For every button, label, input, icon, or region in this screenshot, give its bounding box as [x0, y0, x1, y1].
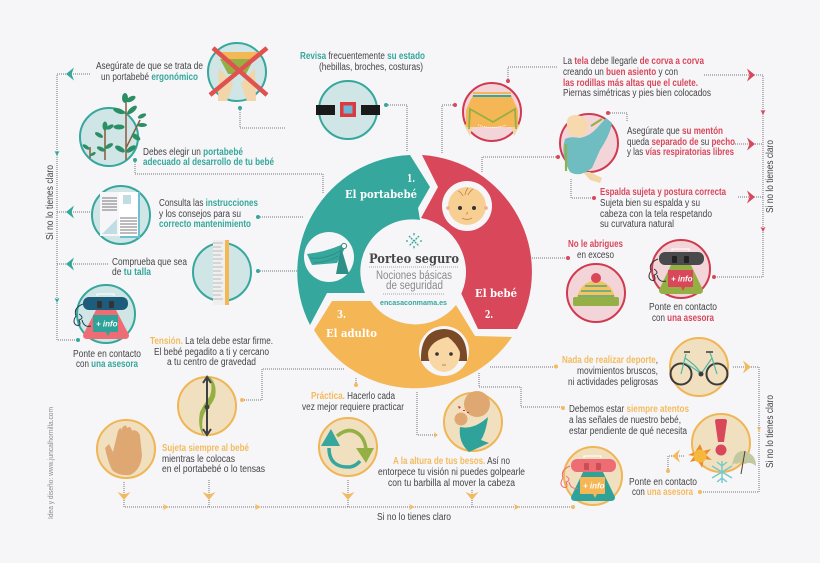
text: attentive: a las señales de nuestro bebé,: [569, 415, 681, 426]
text: chin: [627, 126, 735, 158]
text: hold baby: Sujeta siempre al bebé: [162, 443, 249, 454]
icon: instructions booklet: [92, 186, 150, 244]
text: corva a corva: las rodillas más altas que el culete.: [563, 78, 698, 89]
icon: carrier seat red: [463, 83, 521, 141]
text: contact adviser teal: con una asesora: [76, 359, 138, 370]
icon: telephone teal: [74, 285, 135, 343]
text: right carrier for development: [143, 147, 274, 168]
connectors: yellow bottom and right: [118, 360, 761, 510]
text: no sport: ni actividades peligrosas: [568, 377, 658, 388]
text: ergonomic carrier: [96, 61, 203, 83]
icon: buckle: [316, 81, 380, 139]
text: attentive: Debemos estar siempre atentos: [569, 404, 689, 415]
text: kisses: [378, 456, 525, 489]
segment labels: [326, 172, 517, 340]
text: tension: a tu centro de gravedad: [167, 357, 256, 368]
subtitle: de seguridad: [386, 280, 443, 292]
center logo: [406, 233, 422, 249]
text: contact adviser yellow: con una asesora: [632, 487, 693, 498]
text: hold baby: en el portabebé o lo tensas: [162, 464, 265, 475]
icon: adult face: [419, 326, 469, 376]
text: no sport: [562, 355, 658, 388]
text: credit: Idea y diseño: www.juncalhornilla.com: [48, 407, 55, 519]
icon: telephone teal: + info: [96, 320, 118, 328]
text: contact adviser teal: Ponte en contacto: [73, 349, 141, 360]
text: chin: queda separado de su pecho: [627, 137, 735, 148]
text: contact adviser yellow: Ponte en contacto: [629, 477, 697, 488]
segment labels: 1.: [407, 172, 415, 185]
text: instructions: [159, 198, 258, 230]
text: practice: [302, 391, 405, 413]
text: corva a corva: Piernas simétricas y pies bien colocados: [563, 88, 711, 99]
subtitle: Nociones básicas: [376, 270, 452, 282]
central donut chart: [297, 155, 532, 388]
icon: baby face: [442, 181, 492, 231]
text: instructions: Consulta las instrucciones: [159, 198, 258, 209]
connectors: red right column: [442, 67, 766, 279]
text: size: [112, 257, 187, 278]
icon: cycle arrows: [319, 418, 377, 476]
segment labels: 2.: [485, 308, 493, 321]
icon: warning with weather: [688, 414, 756, 483]
text: revisa: Revisa frecuentemente su estado: [300, 51, 425, 62]
icon: non-ergonomic carrier crossed out: [208, 43, 267, 101]
text: attentive: [569, 404, 689, 437]
text: no sport: movimientos bruscos,: [577, 366, 658, 377]
text: right carrier for development: adecuado al desarrollo de tu bebé: [143, 157, 274, 168]
text: no overdress: No le abrigues: [568, 239, 623, 250]
text: practice: vez mejor requiere practicar: [302, 402, 405, 413]
segment labels: El bebé: [475, 287, 517, 300]
heading: Porteo seguro: [369, 252, 459, 267]
text: instructions: y los consejos para su: [159, 209, 241, 220]
text: chin: Asegúrate que su mentón: [627, 126, 723, 137]
text: kisses: entorpece tu visión ni puedes golpearle: [378, 467, 525, 478]
text: hold baby: mientras le colocas: [162, 454, 235, 465]
icon: measuring tape: [193, 240, 251, 305]
text: right side vertical lower: Si no lo tienes claro: [765, 395, 776, 468]
segment labels: 3.: [337, 308, 346, 321]
text: back: su curvatura natural: [600, 219, 674, 230]
text: corva a corva: [563, 56, 711, 99]
text: tension: El bebé pegadito a ti y cercano: [154, 347, 269, 358]
text: chin: y las vías respiratorias libres: [627, 147, 734, 158]
segment labels: El portabebé: [345, 188, 417, 201]
text: ergonomic carrier: Asegúrate de que se trata de: [96, 61, 203, 72]
text: instructions: correcto mantenimiento: [159, 219, 251, 230]
subtitle: [376, 270, 452, 292]
connectors: teal left column: [54, 68, 407, 342]
segment: el portabebé: [297, 155, 430, 325]
text: left vertical: Si no lo tienes claro: [45, 165, 56, 240]
text: contact adviser red: Ponte en contacto: [649, 302, 717, 313]
text: contact adviser yellow: [629, 477, 697, 498]
icon: telephone red: [649, 240, 710, 298]
text: no overdress: [568, 239, 623, 261]
text: kisses: A la altura de tus besos. Así no: [393, 456, 510, 467]
icon: kissing height: [444, 391, 502, 452]
text: bottom label: Si no lo tienes claro: [377, 512, 451, 523]
text: contact adviser red: con una asesora: [652, 313, 714, 324]
text: contact adviser teal: [73, 349, 141, 370]
text: back: Espalda sujeta y postura correcta: [600, 187, 726, 198]
text: corva a corva: La tela debe llegarle de corva a corva: [563, 56, 704, 67]
text: kisses: con tu barbilla al mover la cabeza: [388, 478, 515, 489]
text: size: de tu talla: [112, 267, 151, 278]
text: right carrier for development: Debes elegir un portabebé: [143, 147, 243, 158]
icon: telephone yellow: [561, 447, 622, 505]
text: back: Sujeta bien su espalda y su: [600, 198, 700, 209]
text: right side vertical upper: Si no lo tienes claro: [765, 140, 776, 213]
segment labels: El adulto: [326, 327, 377, 340]
text: practice: Práctica. Hacerlo cada: [311, 391, 395, 402]
text: hold baby: [162, 443, 265, 475]
text: attentive: estar pendiente de qué necesita: [569, 426, 687, 437]
divider lines: [369, 267, 459, 294]
text: corva a corva: creando un buen asiento y con: [563, 67, 678, 78]
text: size: Comprueba que sea: [112, 257, 187, 268]
text: no sport: Nada de realizar deporte,: [562, 355, 658, 366]
icon: sling: [304, 232, 354, 282]
icon: bicycle: [670, 338, 728, 396]
text: ergonomic carrier: un portabebé ergonómico: [101, 72, 198, 83]
website: encasaconmama.es: [380, 298, 447, 307]
center disc: [362, 220, 466, 324]
text: no overdress: en exceso: [577, 250, 614, 261]
text: back: [600, 187, 726, 230]
text: tension: Tensión. La tela debe estar firme.: [150, 336, 273, 347]
text: revisa: (hebillas, broches, costuras): [319, 62, 423, 73]
text: back: cabeza con la tela respetando: [600, 209, 712, 220]
icon: telephone yellow: + info: [583, 482, 605, 490]
icon: tension ribbon: [178, 375, 236, 436]
icon: baby in wrap side view: [560, 114, 618, 183]
icon: telephone red: + info: [671, 274, 693, 284]
segment: el adulto: [314, 301, 512, 388]
text: contact adviser red: [649, 302, 717, 324]
text: tension: [150, 336, 273, 368]
icon: growing plants: [80, 93, 147, 166]
icon: wool hat: [567, 264, 625, 322]
icon: hand: [97, 420, 155, 478]
text: revisa: [300, 51, 425, 73]
segment: el bebé: [421, 155, 532, 329]
